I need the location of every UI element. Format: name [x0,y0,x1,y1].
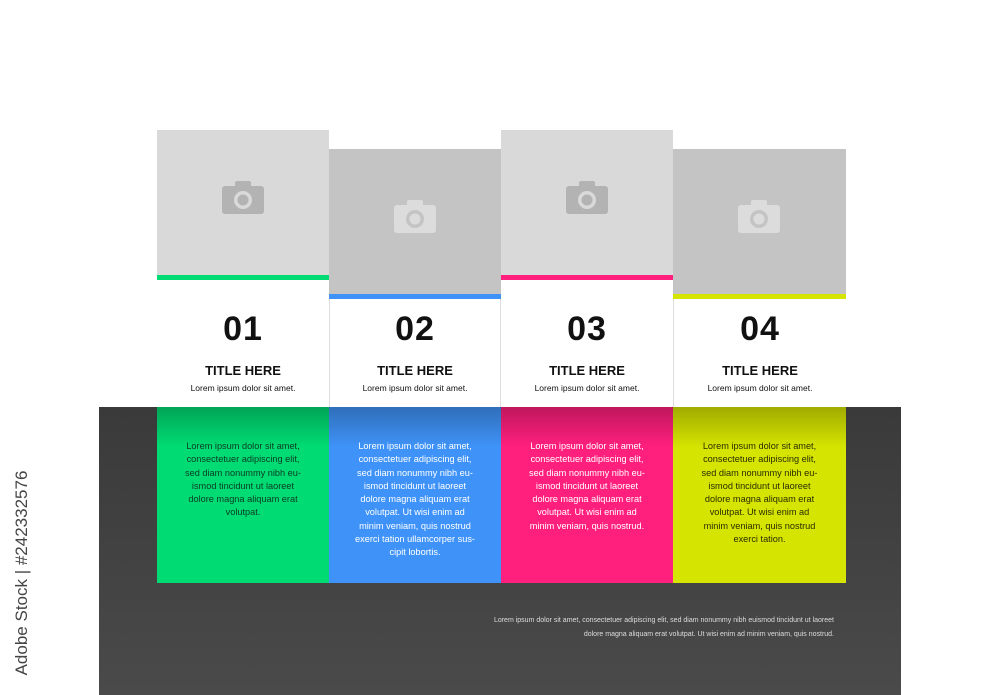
panel yellow: sed diam nonummy nibh eu- [702,468,817,478]
card 01 [157,280,329,407]
panel pink: Lorem ipsum dolor sit amet, [530,441,644,451]
panel yellow: exerci tation. [733,534,786,544]
panel pink: consectetuer adipiscing elit, [531,454,643,464]
column 4 [673,149,846,407]
footer text: Lorem ipsum dolor sit amet, consectetuer adipiscing elit, sed diam nonummy nibh euismod tincidunt ut laoreet [494,617,834,624]
panel pink: dolore magna aliquam erat [532,494,642,504]
panel pink: minim veniam, quis nostrud. [530,521,644,531]
photo placeholder 4 [673,149,846,294]
accent bar green [157,275,329,280]
panel blue: exerci tation ullamcorper sus- [355,534,475,544]
panel blue: dolore magna aliquam erat [360,494,470,504]
card 04: TITLE HERE [722,363,798,378]
panel pink: ismod tincidunt ut laoreet [536,481,638,491]
panel green: dolore magna aliquam erat [188,494,298,504]
panel yellow: minim veniam, quis nostrud [704,521,815,531]
footer text [494,616,834,638]
panel pink: volutpat. Ut wisi enim ad [537,507,637,517]
panel yellow: ismod tincidunt ut laoreet [708,481,811,491]
watermark side text: Adobe Stock | #242332576 [12,471,31,675]
column 1 [157,130,329,393]
accent bar pink [501,275,673,280]
panel blue: sed diam nonummy nibh eu- [357,468,473,478]
panel blue [329,407,501,583]
icon: camera [394,200,436,233]
panel blue: Lorem ipsum dolor sit amet, [358,441,472,451]
card 02: 02 [395,310,435,348]
accent bar blue [329,294,501,299]
photo placeholder 1 [157,130,329,275]
card 03: 03 [567,310,607,348]
card 04: Lorem ipsum dolor sit amet. [708,383,812,393]
panel blue: cipit lobortis. [389,547,441,557]
card 01: Lorem ipsum dolor sit amet. [191,383,295,393]
card 04 [673,299,846,407]
card 01: 01 [223,310,263,348]
icon: camera [566,181,608,214]
panel yellow: consectetuer adipiscing elit, [703,454,816,464]
panel green: sed diam nonummy nibh eu- [185,468,301,478]
panel green: Lorem ipsum dolor sit amet, [186,441,300,451]
panel blue: ismod tincidunt ut laoreet [364,481,466,491]
column 2 [329,149,501,407]
accent bar yellow [673,294,846,299]
icon: camera [738,200,780,233]
card 02: TITLE HERE [377,363,453,378]
panel green: volutpat. [226,507,260,517]
card 01: TITLE HERE [205,363,281,378]
panel pink: sed diam nonummy nibh eu- [529,468,645,478]
panel green: ismod tincidunt ut laoreet [192,481,294,491]
dark background block [99,407,901,695]
icon: camera [222,181,264,214]
card 04: 04 [740,310,780,348]
card 02: Lorem ipsum dolor sit amet. [363,383,467,393]
panel pink [501,407,673,583]
photo placeholder 2 [329,149,501,294]
panel blue: consectetuer adipiscing elit, [359,454,471,464]
panel blue: volutpat. Ut wisi enim ad [365,507,465,517]
panel green [157,407,329,583]
card 03: Lorem ipsum dolor sit amet. [535,383,639,393]
panel yellow: volutpat. Ut wisi enim ad [710,507,809,517]
panel yellow: dolore magna aliquam erat [705,494,814,504]
photo placeholder 3 [501,130,673,275]
panel yellow [673,407,846,583]
panel yellow: Lorem ipsum dolor sit amet, [703,441,816,451]
panel blue: minim veniam, quis nostrud [359,521,471,531]
card 03: TITLE HERE [549,363,625,378]
footer text: dolore magna aliquam erat volutpat. Ut wisi enim ad minim veniam, quis nostrud. [584,630,834,638]
panel green: consectetuer adipiscing elit, [187,454,299,464]
column 3 [501,130,673,393]
card 02 [329,299,501,407]
card 03 [501,280,673,407]
